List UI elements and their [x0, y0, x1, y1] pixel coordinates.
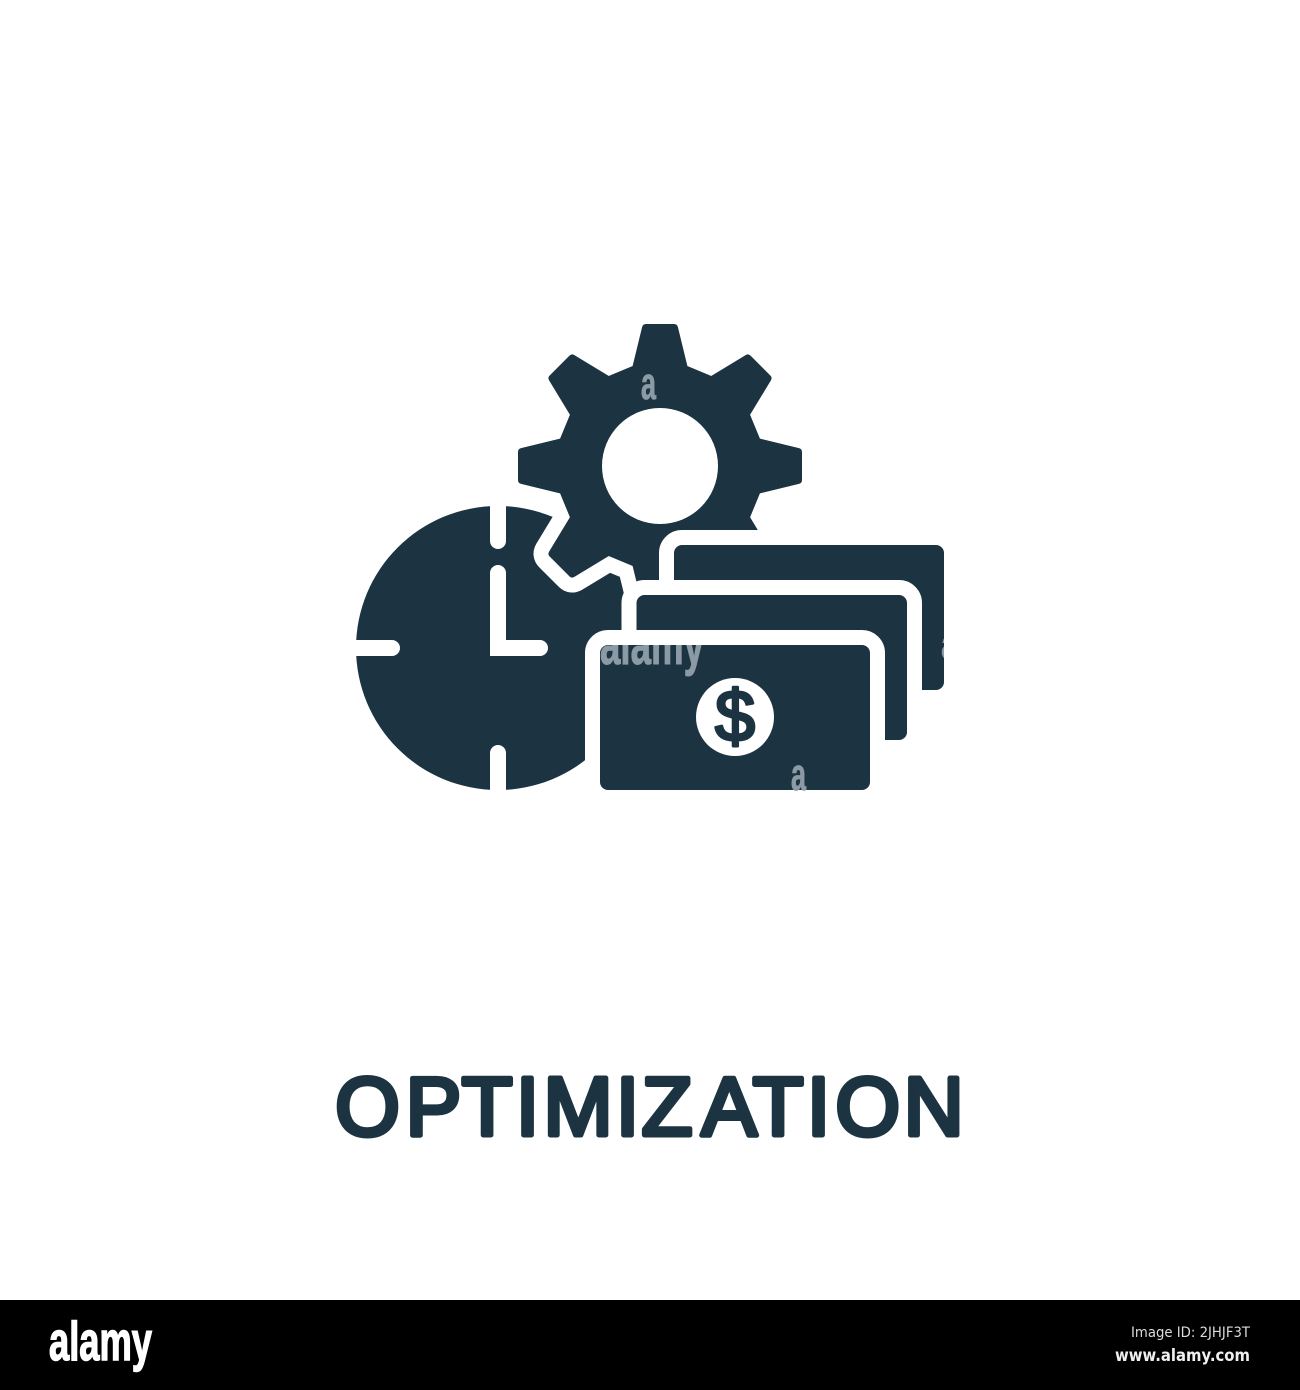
footer bar [0, 1300, 1300, 1390]
title: OPTIMIZATION [335, 1060, 964, 1153]
watermark letter on back banknote: a [941, 623, 957, 667]
infographic canvas [0, 324, 1300, 1390]
image id: Image ID: 2JHJF3T [1131, 1325, 1250, 1341]
icon: gear [522, 328, 798, 604]
watermark letter on gear: a [641, 358, 657, 409]
icon: back banknote [674, 545, 944, 690]
icon: optimization (clock, gear and banknotes) [350, 328, 957, 800]
icon: clock [350, 500, 640, 796]
website: www.alamy.com [1115, 1346, 1250, 1365]
footer logo: alamy [49, 1310, 152, 1372]
watermark letter on front banknote: a [791, 749, 807, 800]
icon: dollar coin [696, 677, 774, 757]
icon: front banknote [600, 645, 870, 790]
icon: middle banknote [636, 595, 907, 740]
watermark: alamy on banknote: alamy [600, 613, 704, 677]
icon: dollar coin: $ [715, 677, 755, 757]
